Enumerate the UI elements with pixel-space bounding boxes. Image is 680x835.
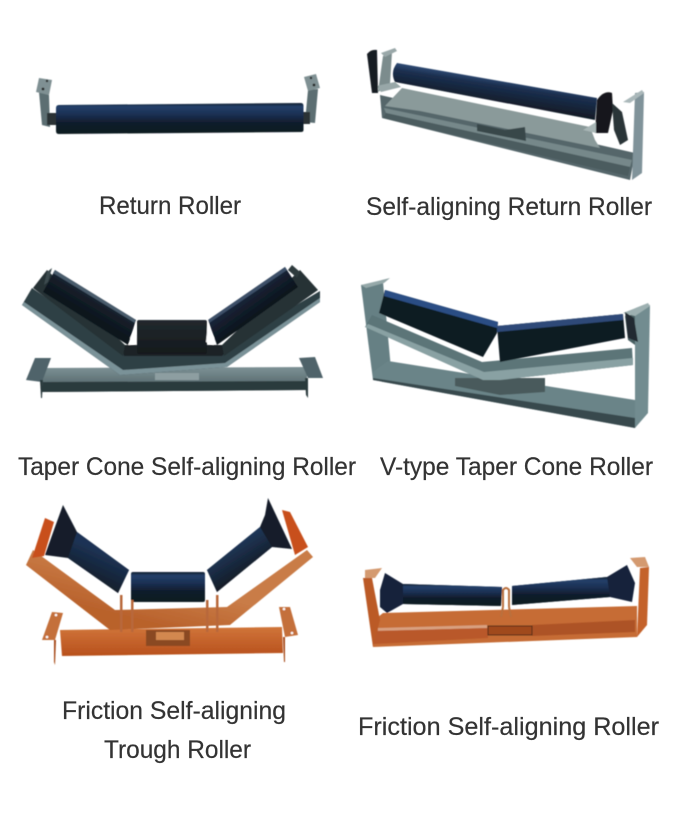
product image: return roller — [36, 74, 320, 134]
product image: v-type taper cone roller — [361, 278, 650, 428]
label: friction self-aligning trough roller — [62, 697, 286, 764]
label: friction self-aligning trough roller: Friction Self-aligning — [62, 697, 286, 725]
product image: friction self-aligning trough roller — [26, 498, 313, 665]
label: self-aligning return roller: Self-aligning Return Roller — [366, 193, 652, 221]
label: taper cone self-aligning roller: Taper Cone Self-aligning Roller — [18, 453, 356, 481]
label: friction self-aligning roller: Friction Self-aligning Roller — [358, 713, 659, 741]
product image: taper cone self-aligning roller — [22, 265, 323, 398]
label: friction self-aligning trough roller: Trough Roller — [104, 736, 251, 764]
label: v-type taper cone roller: V-type Taper Cone Roller — [380, 453, 653, 481]
product image: friction self-aligning roller — [363, 557, 649, 647]
label: return roller: Return Roller — [99, 192, 241, 220]
product image: self-aligning return roller — [367, 48, 644, 180]
